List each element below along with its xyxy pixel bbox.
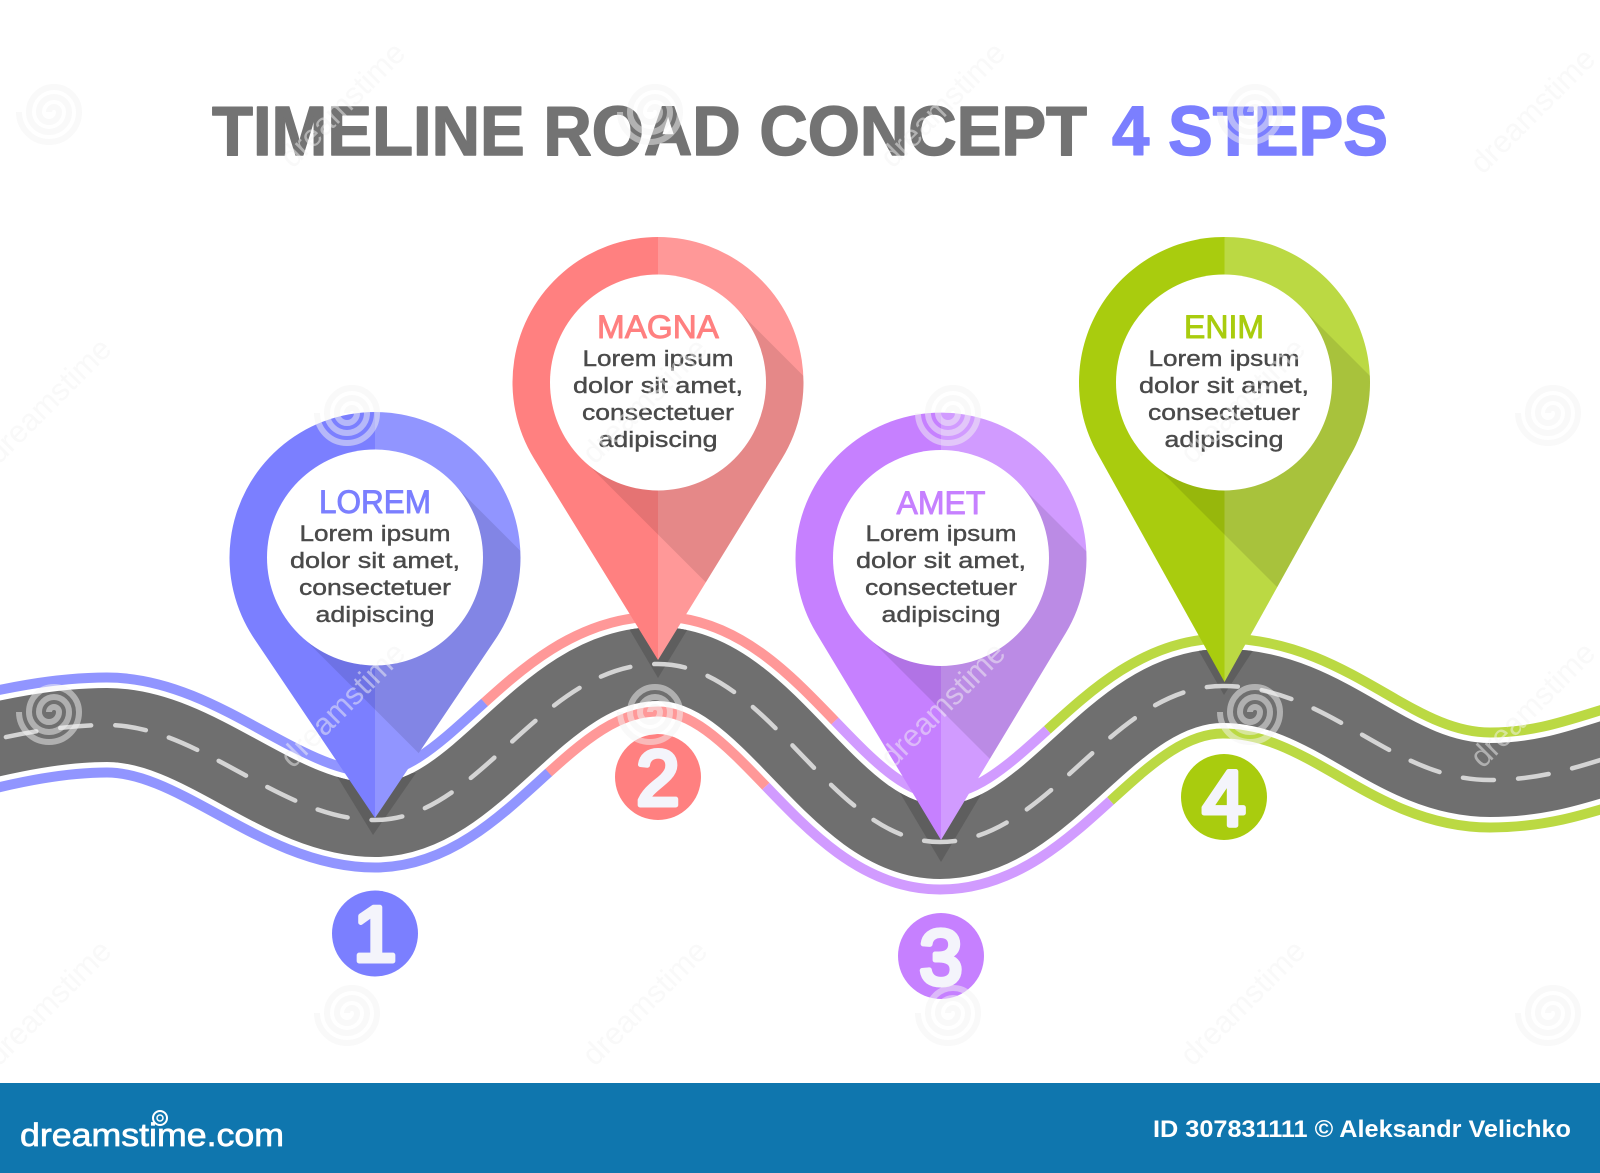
pin 4: Enim: dolor sit amet, <box>1139 373 1309 398</box>
road centre dashes <box>0 664 1600 842</box>
number badge 2: 2 <box>636 734 680 822</box>
footer credit text: ID 307831111 © Aleksandr Velichko <box>1153 1116 1571 1143</box>
watermark layer: dreamstime <box>575 331 714 470</box>
pin 3: Amet: adipiscing <box>882 602 1000 627</box>
road asphalt <box>0 664 1600 842</box>
watermark layer: dreamstime <box>1173 331 1312 470</box>
number badge 1 <box>332 890 418 978</box>
watermark layer: dreamstime <box>273 635 412 774</box>
pin 4: Enim: adipiscing <box>1164 427 1284 452</box>
watermark layer: dreamstime <box>273 35 412 174</box>
pin 3: Amet: Lorem ipsum <box>866 521 1016 546</box>
number badge 2 <box>615 734 701 822</box>
title: TIMELINE ROAD CONCEPT <box>212 92 1087 170</box>
pin 4: Enim: ENIM <box>1184 309 1264 345</box>
footer logo text: dreamstime.com <box>20 1117 284 1153</box>
road edge: purple segment <box>762 718 1114 894</box>
footer bar <box>0 1083 1600 1173</box>
watermark layer: dreamstime <box>1173 933 1312 1072</box>
watermark layer: dreamstime <box>1463 635 1600 774</box>
number badge 3: 3 <box>919 913 963 1001</box>
road white border <box>0 664 1600 842</box>
pin 1: Lorem: adipiscing <box>316 602 434 627</box>
pin 4: Enim: consectetuer <box>1148 400 1300 425</box>
pin 3: Amet: dolor sit amet, <box>856 548 1026 573</box>
pin shadows on road <box>335 627 1256 862</box>
number badge 3 <box>898 913 984 1001</box>
pin 2: Magna: Lorem ipsum <box>582 346 734 371</box>
pin 1: Lorem: Lorem ipsum <box>300 521 450 546</box>
road edge: blue segment <box>0 672 552 872</box>
pin 2: Magna <box>512 237 804 660</box>
number badge 4 <box>1181 754 1267 842</box>
pin 2: Magna: MAGNA <box>597 309 720 345</box>
winding road <box>0 664 1600 842</box>
pin 3: Amet: AMET <box>896 485 986 521</box>
road edge: green segment <box>1044 635 1600 832</box>
pin 1: Lorem <box>230 412 520 818</box>
watermark layer: dreamstime <box>575 933 714 1072</box>
pin 1: Lorem: consectetuer <box>299 575 451 600</box>
pin 3: Amet <box>796 412 1086 840</box>
pin 4: Enim <box>1079 237 1370 682</box>
pin 2: Magna: dolor sit amet, <box>573 373 743 398</box>
pin 2: Magna: adipiscing <box>598 427 718 452</box>
number badge 4: 4 <box>1202 754 1246 842</box>
pin 1: Lorem: LOREM <box>319 484 431 520</box>
pin 2: Magna: consectetuer <box>582 400 734 425</box>
pin 3: Amet: consectetuer <box>865 575 1017 600</box>
watermark layer: dreamstime <box>873 635 1012 774</box>
number badge 1: 1 <box>353 890 397 978</box>
watermark layer: dreamstime <box>873 35 1012 174</box>
watermark layer: dreamstime <box>1463 41 1600 180</box>
pin 4: Enim: Lorem ipsum <box>1148 346 1300 371</box>
pin 1: Lorem: dolor sit amet, <box>290 548 460 573</box>
road edge: red segment <box>481 614 838 790</box>
title: 4 STEPS <box>1112 92 1388 170</box>
